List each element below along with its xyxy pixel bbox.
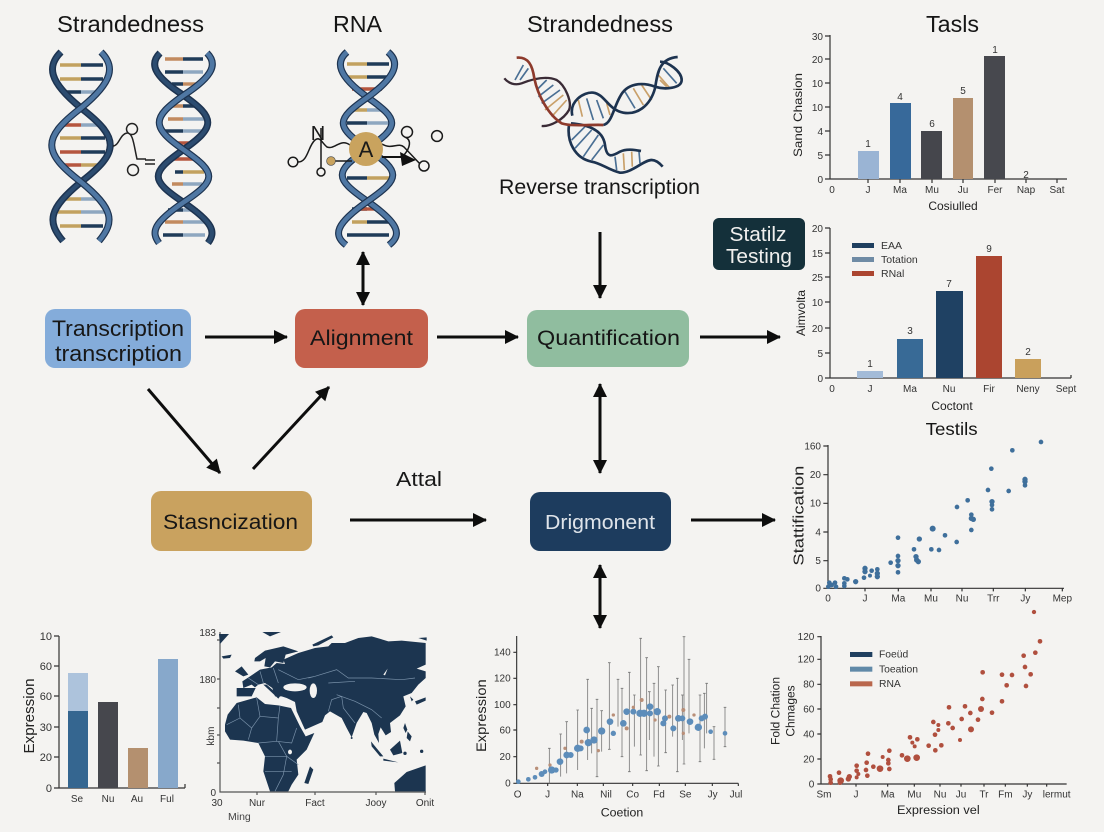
process box: Drigmonent: Drigmonent — [545, 512, 655, 534]
x axis title: Coetion — [601, 806, 643, 820]
arrow: Quantification to chart — [700, 336, 780, 338]
y axis ticks — [812, 224, 823, 385]
y axis ticks: 60 — [40, 691, 52, 703]
x axis ticks: Nu — [934, 790, 946, 801]
x axis ticks: 0 — [829, 185, 835, 196]
bar value labels: 2 — [1023, 170, 1029, 181]
axis labels: 30 — [211, 798, 223, 809]
x axis ticks: Ju — [958, 185, 968, 196]
x axis ticks: Mep — [1053, 594, 1072, 605]
points — [828, 610, 1042, 785]
axis labels: kbm — [206, 727, 217, 745]
arrow: Alignment to Quantification — [437, 336, 518, 338]
bars — [858, 56, 1005, 179]
arrow: Stasncization to Drigmonent — [350, 518, 486, 522]
icon: amino node network: N — [311, 123, 325, 145]
y axis ticks: 15 — [812, 249, 823, 260]
y axis ticks: 20 — [812, 324, 823, 335]
process box: Alignment: Alignment — [310, 327, 413, 350]
heading: Strandedness left: Strandedness — [57, 11, 204, 37]
bar value labels: 4 — [897, 92, 903, 103]
bar chart: Expression — [21, 631, 185, 805]
y axis ticks: 60 — [803, 704, 815, 715]
y axis ticks — [804, 441, 821, 595]
legend — [852, 240, 918, 280]
x axis ticks — [829, 384, 1077, 395]
x axis ticks — [817, 790, 1071, 801]
axis labels: Nur — [249, 798, 266, 809]
callout: Statilz Testing: Testing — [726, 246, 792, 268]
x axis ticks: lermut — [1043, 790, 1071, 801]
scatter chart: Fold change — [768, 610, 1071, 817]
x axis ticks: Se — [679, 789, 692, 800]
y axis ticks: 10 — [812, 103, 823, 114]
x axis ticks: Nap — [1017, 185, 1036, 196]
legend: EAA — [881, 240, 902, 252]
x axis ticks: Nu — [943, 384, 955, 395]
error bar scatter chart: Expression — [473, 636, 742, 820]
legend: RNal — [881, 268, 904, 280]
secondary points — [535, 698, 696, 770]
y axis ticks: 10 — [812, 79, 823, 90]
process box: Drigmonent — [530, 492, 671, 551]
x axis ticks: Ma — [903, 384, 917, 395]
y axis ticks: 5 — [817, 349, 823, 360]
y axis ticks — [798, 632, 815, 791]
y axis ticks: 0 — [817, 374, 823, 385]
x axis ticks: O — [514, 789, 522, 800]
axis labels: Ming — [228, 811, 251, 823]
y axis ticks: 20 — [40, 752, 52, 764]
x axis ticks: Ma — [891, 594, 906, 605]
x axis ticks: J — [853, 790, 858, 801]
callout: Statilz Testing — [713, 218, 805, 270]
x axis ticks: Tr — [979, 790, 989, 801]
bar chart: Tasls — [791, 32, 1067, 213]
icon: DNA helix RNA — [339, 52, 396, 245]
y axis ticks — [812, 32, 823, 186]
x axis ticks: Co — [626, 789, 639, 800]
y axis ticks: 10 — [812, 298, 823, 309]
error bars — [548, 637, 726, 783]
legend: Toeation — [879, 664, 918, 675]
y axis ticks: 120 — [494, 674, 511, 685]
y axis ticks: 0 — [809, 780, 815, 791]
y axis title: Expression — [473, 679, 489, 752]
bar value labels: 9 — [986, 244, 992, 255]
heading: Tasls: Tasls — [926, 11, 979, 37]
y axis title: Stattification — [791, 466, 807, 566]
legend: RNA — [879, 679, 901, 690]
icon: DNA helix left — [52, 52, 110, 241]
bar value labels: 6 — [929, 119, 935, 130]
x axis ticks: Sat — [1049, 185, 1065, 196]
y axis title: Chmages — [783, 685, 797, 737]
y axis ticks: 10 — [810, 499, 821, 510]
y axis ticks: 60 — [40, 661, 52, 673]
arrow: Drigmonent to scatter — [691, 518, 775, 522]
heading: Strandedness centre: Strandedness — [527, 11, 673, 37]
y axis ticks: 4 — [817, 127, 823, 138]
legend: Totation — [881, 254, 918, 266]
y axis ticks: 25 — [812, 273, 823, 284]
legend — [850, 650, 918, 690]
x axis ticks: Fer — [988, 185, 1003, 196]
y axis title: Aimvolta — [794, 290, 808, 336]
legend: Foeüd — [879, 650, 909, 661]
text: Attal: Attal — [396, 469, 442, 491]
axis labels: 180 — [199, 675, 216, 686]
bar value labels: 7 — [946, 279, 952, 290]
process box: Transcription: Transcription — [52, 316, 184, 341]
axis labels: Jooy — [365, 798, 387, 809]
bar value labels: 1 — [865, 139, 871, 150]
y axis ticks: 10 — [40, 631, 52, 643]
x axis ticks: Au — [131, 794, 143, 805]
x axis ticks: Jy — [708, 789, 718, 800]
seas and borders — [227, 668, 415, 791]
y axis ticks: 60 — [500, 725, 511, 736]
process box: Quantification: Quantification — [537, 327, 680, 350]
points — [516, 703, 727, 784]
bar value labels: 5 — [960, 86, 966, 97]
y axis ticks: 5 — [817, 151, 823, 162]
y axis ticks: 40 — [803, 729, 815, 740]
bar value labels: 1 — [867, 359, 873, 370]
y axis ticks: 140 — [494, 648, 511, 659]
x axis ticks: Mu — [907, 790, 921, 801]
y axis ticks: 30 — [40, 722, 52, 734]
arrow: Quantification and Drigmonent — [598, 384, 602, 473]
x axis ticks — [825, 594, 1072, 605]
x axis title: Expression vel — [897, 803, 980, 817]
x axis ticks: Fir — [983, 384, 995, 395]
x axis ticks: Ju — [956, 790, 966, 801]
y axis ticks: 5 — [815, 556, 821, 567]
y axis ticks — [494, 648, 511, 790]
x axis ticks: Jy — [1022, 790, 1032, 801]
y axis title — [768, 677, 797, 745]
x axis ticks: Mu — [925, 185, 939, 196]
title: Testils — [926, 419, 978, 439]
y axis ticks: 100 — [494, 700, 511, 711]
y axis ticks: 30 — [812, 32, 823, 43]
y axis title: Sand Chasion — [791, 73, 805, 157]
callout: Statilz Testing: Statilz — [730, 224, 786, 246]
arrow: Transcription to Alignment — [205, 336, 287, 338]
bar value labels: 1 — [992, 45, 998, 56]
y axis ticks: 0 — [46, 783, 52, 795]
x axis ticks: Na — [571, 789, 584, 800]
icon: connector between helices — [113, 124, 155, 176]
y axis ticks: 120 — [798, 655, 815, 666]
bars — [68, 659, 178, 788]
x axis ticks: Trr — [987, 594, 1000, 605]
points — [826, 440, 1043, 589]
x axis ticks: Ma — [881, 790, 895, 801]
axis labels: Fact — [305, 798, 325, 809]
y axis ticks: 160 — [804, 441, 821, 452]
icon: amino node network: A — [359, 137, 374, 162]
process box: Transcription: transcription — [55, 341, 182, 366]
y axis ticks: 20 — [812, 55, 823, 66]
x axis ticks: Fm — [998, 790, 1013, 801]
arrow: Drigmonent to lower scatter — [598, 565, 602, 628]
x axis ticks: Jul — [730, 789, 742, 800]
x axis ticks: Neny — [1016, 384, 1040, 395]
bar chart: Coctont — [794, 224, 1077, 413]
x axis ticks: Sm — [817, 790, 831, 801]
y axis ticks: 20 — [810, 470, 821, 481]
x axis ticks: Mu — [924, 594, 938, 605]
x axis title: Coctont — [931, 399, 973, 413]
x axis ticks: Fd — [653, 789, 665, 800]
x axis ticks: Jy — [1020, 594, 1030, 605]
axis labels: 0 — [210, 788, 216, 799]
arrow: Stasncization to Alignment — [253, 387, 329, 469]
x axis ticks: Nu — [956, 594, 968, 605]
x axis ticks: J — [862, 594, 867, 605]
icon: reverse transcription DNA — [504, 57, 682, 173]
y axis ticks: 20 — [812, 224, 823, 235]
x axis ticks: Se — [71, 794, 84, 805]
y axis ticks: 0 — [815, 584, 821, 595]
x axis ticks: J — [866, 185, 870, 196]
bar value labels: 2 — [1025, 347, 1031, 358]
x axis ticks: J — [545, 789, 550, 800]
process box: Transcription — [45, 309, 191, 368]
x axis ticks: Ful — [160, 794, 174, 805]
icon: DNA helix second — [155, 53, 212, 243]
heading: RNA: RNA — [333, 11, 383, 37]
land masses — [219, 632, 427, 791]
bar value labels: 3 — [907, 326, 913, 337]
icon: amino node network — [288, 123, 442, 176]
x axis ticks: J — [868, 384, 872, 395]
process box: Stasncization: Stasncization — [163, 511, 298, 534]
x axis ticks: 0 — [825, 594, 831, 605]
x axis ticks — [514, 789, 742, 800]
x axis title: Cosiulled — [928, 199, 978, 213]
text: Reverse transcription: Reverse transcription — [499, 176, 700, 199]
y axis ticks: 0 — [505, 779, 511, 790]
arrow: Transcription to Stasncization — [148, 389, 220, 473]
y axis ticks: 20 — [803, 754, 815, 765]
process box: Stasncization — [151, 491, 312, 551]
y axis title: Fold Chation — [768, 677, 782, 745]
x axis ticks — [71, 794, 174, 805]
arrow: Reverse transcription to Quantification — [598, 232, 602, 298]
arrow: RNA to Alignment — [362, 252, 364, 305]
y axis ticks — [40, 631, 52, 795]
y axis ticks: 20 — [500, 752, 511, 763]
x axis ticks: Ma — [893, 185, 907, 196]
y axis ticks: 80 — [803, 680, 815, 691]
y axis title: Expression — [21, 678, 38, 754]
process box: Quantification — [527, 310, 689, 367]
map: world region — [199, 628, 434, 823]
axis labels: 183 — [199, 628, 216, 639]
bar value labels — [867, 244, 1031, 370]
x axis ticks: 0 — [829, 384, 835, 395]
y axis ticks: 120 — [798, 632, 815, 643]
process box: Alignment — [295, 309, 428, 368]
x axis ticks: Nu — [102, 794, 114, 805]
axis labels: Onit — [416, 798, 434, 809]
axis labels — [199, 628, 434, 823]
x axis ticks — [829, 185, 1065, 196]
x axis ticks: Nil — [600, 789, 612, 800]
bar value labels — [865, 45, 1029, 181]
y axis ticks: 0 — [817, 175, 823, 186]
bars — [857, 256, 1041, 378]
x axis ticks: Sept — [1056, 384, 1077, 395]
scatter chart: Testils — [791, 419, 1072, 605]
y axis ticks: 4 — [815, 527, 821, 538]
